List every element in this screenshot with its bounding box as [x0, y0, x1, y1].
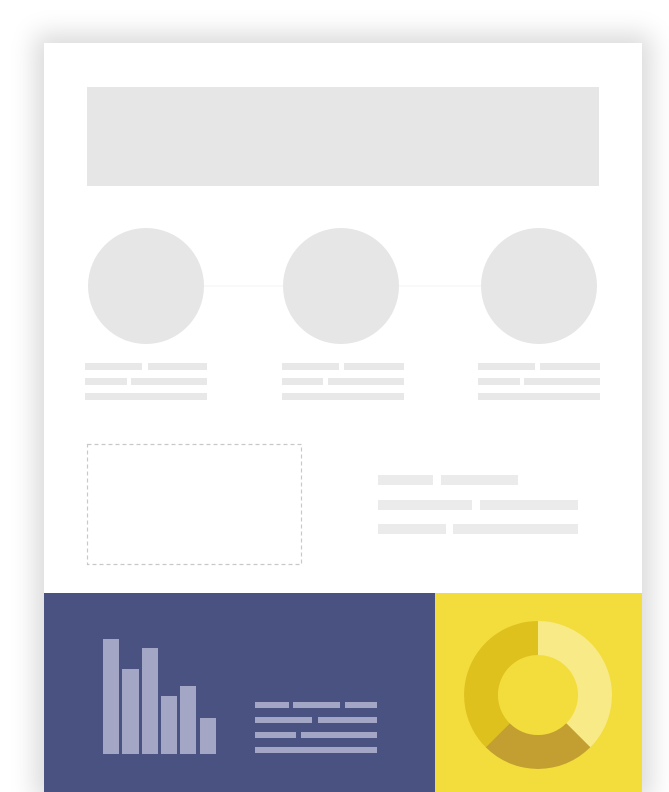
step circles — [88, 228, 597, 344]
panel: yellow donut band — [435, 593, 642, 792]
panel: blue stats band — [44, 593, 435, 792]
text lines under circle 2 — [282, 363, 404, 400]
connector line between circles — [146, 285, 539, 287]
text lines under circle 3 — [478, 363, 600, 400]
text lines under circle 1 — [85, 363, 207, 400]
text lines right of placeholder — [378, 475, 578, 534]
donut chart — [464, 621, 612, 769]
dashed image placeholder — [88, 444, 302, 564]
header banner placeholder — [87, 87, 599, 186]
bar chart — [103, 639, 216, 754]
text lines in blue band — [255, 702, 377, 753]
